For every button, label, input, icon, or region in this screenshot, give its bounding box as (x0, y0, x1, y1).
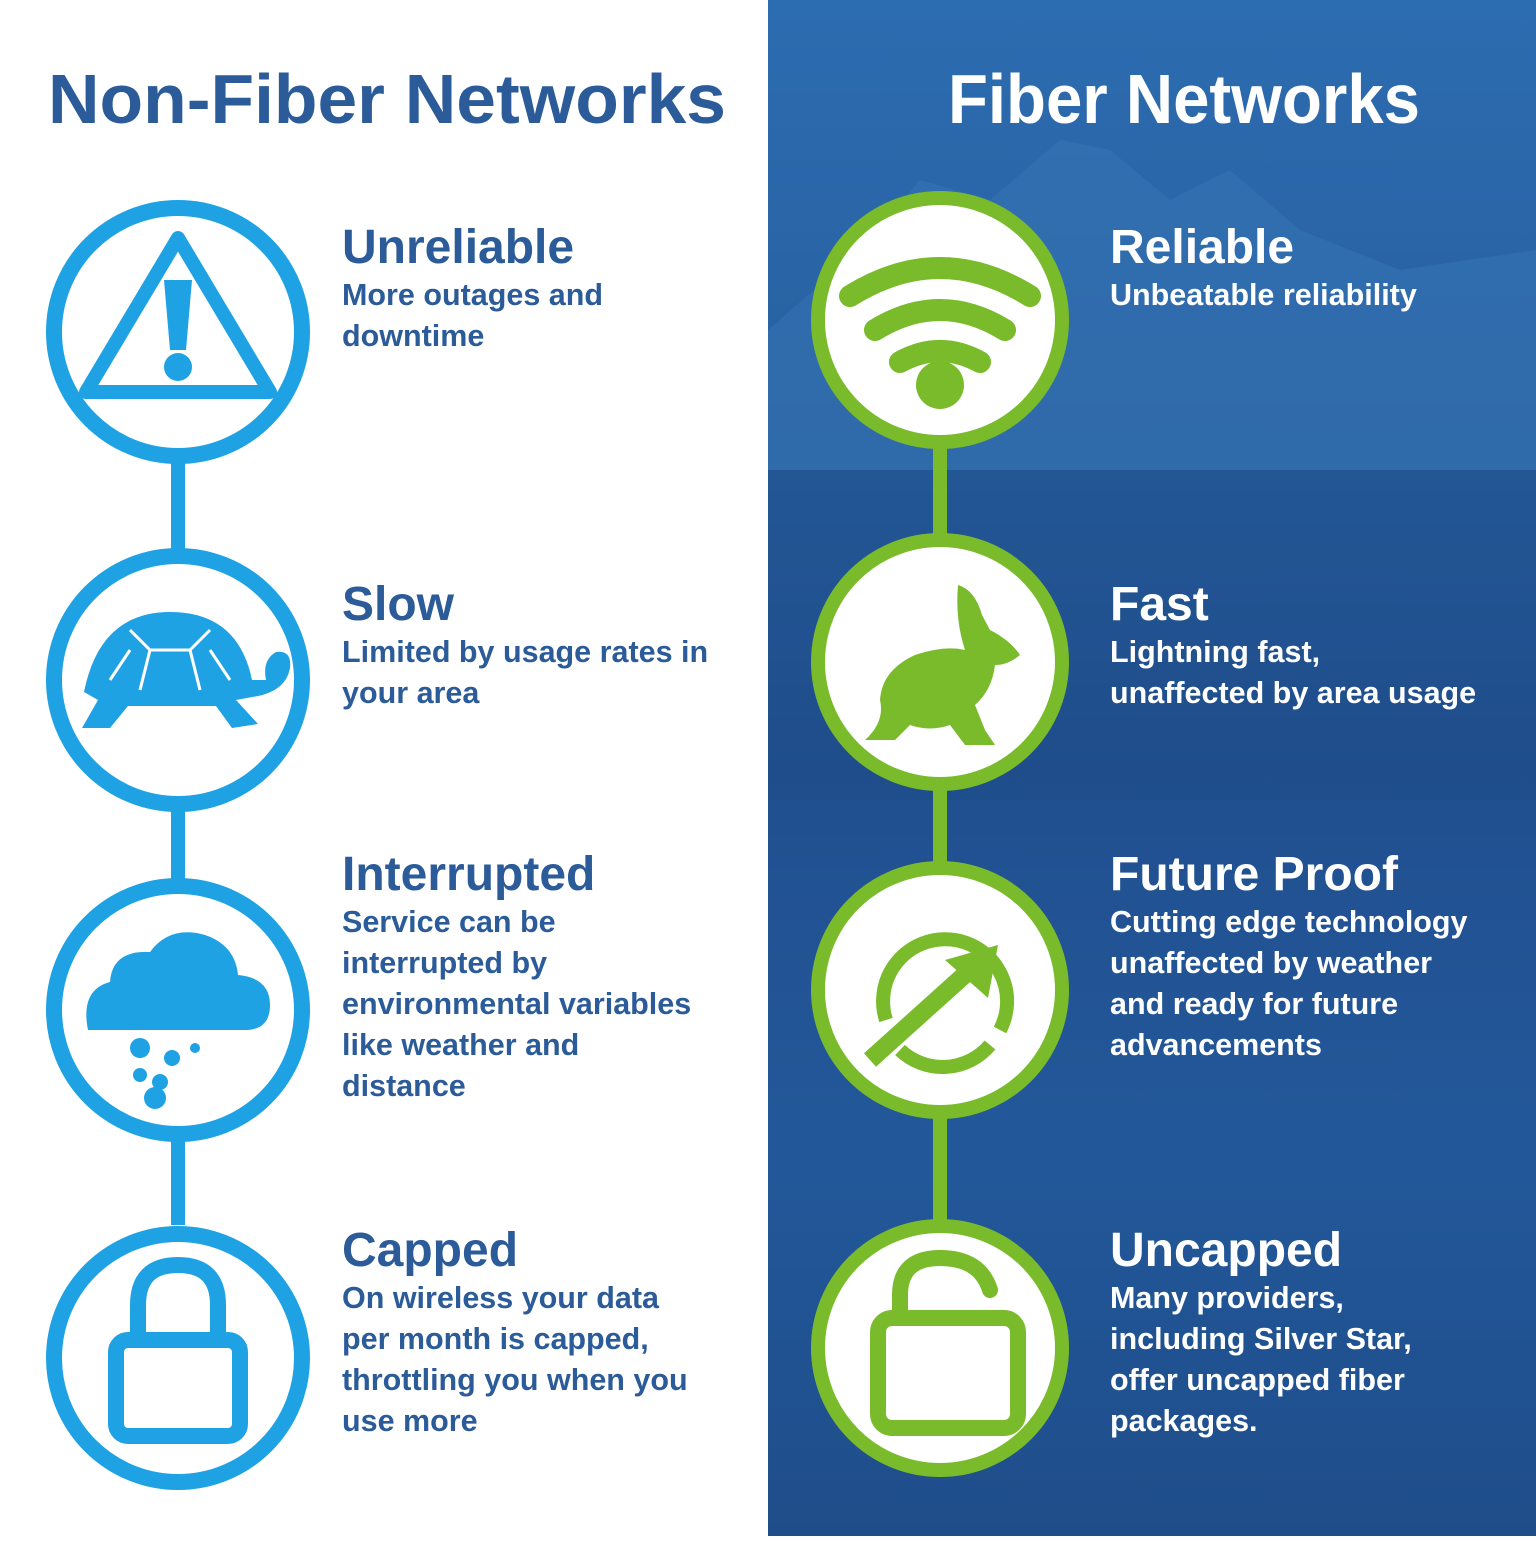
icon: lock (54, 1234, 302, 1482)
text: left items: Interrupted (342, 848, 595, 901)
text: right items: and ready for future (1110, 987, 1398, 1021)
icon: future arrow (818, 868, 1062, 1112)
text: left items: Slow (342, 578, 455, 631)
text: left items: Limited by usage rates in (342, 635, 708, 669)
title: fiber: Fiber Networks (948, 60, 1420, 138)
text: right items: unaffected by area usage (1110, 676, 1476, 710)
icon: cloud (54, 886, 302, 1134)
text: right items: packages. (1110, 1404, 1258, 1438)
icon: rabbit (818, 540, 1062, 784)
text: left items: per month is capped, (342, 1322, 649, 1356)
text: left items: throttling you when you (342, 1363, 688, 1397)
text: right items: Cutting edge technology (1110, 905, 1468, 939)
text: left items: use more (342, 1404, 478, 1438)
right connectors (933, 445, 947, 1220)
text: left items: downtime (342, 319, 484, 353)
text: left items: interrupted by (342, 946, 547, 980)
text: left items: More outages and (342, 278, 603, 312)
text: left items: your area (342, 676, 480, 710)
icon: wifi (818, 198, 1062, 442)
icon: open lock (818, 1226, 1062, 1470)
text: right items: Future Proof (1110, 848, 1399, 901)
text: right items: advancements (1110, 1028, 1322, 1062)
text: left items: like weather and (342, 1028, 579, 1062)
text: left items: distance (342, 1069, 466, 1103)
text: left items: Service can be (342, 905, 556, 939)
text: left items: Capped (342, 1224, 518, 1277)
text: right items: unaffected by weather (1110, 946, 1432, 980)
text: right items: Many providers, (1110, 1281, 1344, 1315)
text: right items: Lightning fast, (1110, 635, 1320, 669)
title: non-fiber: Non-Fiber Networks (48, 60, 726, 138)
panel: fiber background (768, 0, 1536, 1536)
left connectors (171, 460, 185, 1225)
text: right items: Fast (1110, 578, 1209, 631)
text: right items (1110, 221, 1476, 1438)
text: left items (342, 221, 708, 1438)
text: left items: Unreliable (342, 221, 574, 274)
text: left items: On wireless your data (342, 1281, 660, 1315)
icon: warning (54, 208, 302, 456)
text: right items: Reliable (1110, 221, 1294, 274)
text: right items: including Silver Star, (1110, 1322, 1412, 1356)
text: left items: environmental variables (342, 987, 691, 1021)
text: right items: Uncapped (1110, 1224, 1342, 1277)
text: right items: Unbeatable reliability (1110, 278, 1417, 312)
icon: turtle (54, 556, 302, 804)
text: right items: offer uncapped fiber (1110, 1363, 1405, 1397)
